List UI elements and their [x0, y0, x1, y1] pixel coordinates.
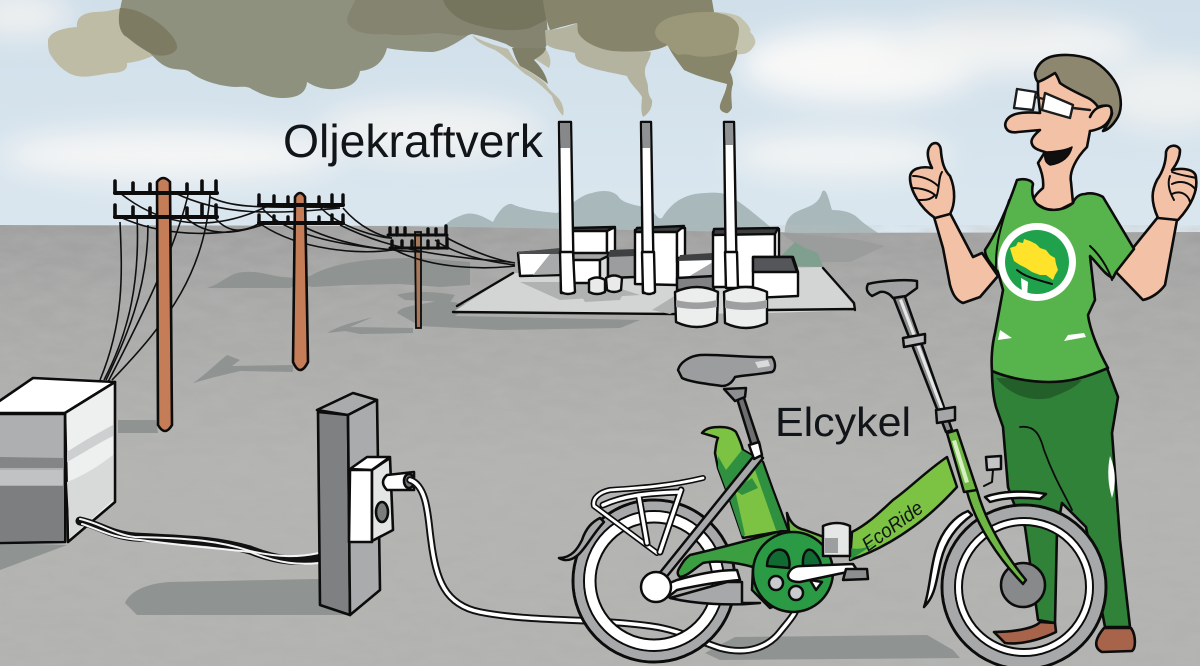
mouth: [1045, 147, 1072, 165]
charging post: [317, 393, 414, 615]
small tanks: [589, 278, 605, 294]
glasses: [1014, 89, 1090, 118]
head tube: [947, 430, 977, 492]
front wheel: [942, 505, 1106, 666]
saddle: [678, 355, 775, 386]
large tank two: [724, 287, 767, 328]
left arm and hand: [910, 143, 998, 303]
cable bundle from box to charging post: [80, 519, 319, 564]
chimney three: [724, 122, 737, 288]
neck and head: [1005, 70, 1112, 213]
smoke: dark right mass: [543, 0, 714, 52]
chain guard: [678, 532, 790, 608]
building: tall block one: [572, 230, 607, 253]
rear hub: [641, 572, 671, 602]
folding clamp: [936, 407, 955, 423]
ground shadows: [0, 232, 960, 660]
seat post: [735, 392, 760, 450]
handlebar: [867, 280, 917, 298]
battery and seat tube: [702, 427, 788, 538]
smoke: plume two: [545, 23, 652, 117]
chimney two: [641, 122, 654, 293]
wall socket: [349, 457, 393, 542]
smoke: light left puff: [48, 8, 155, 77]
shadows on platform: [520, 282, 720, 314]
utility pole one: [115, 178, 217, 431]
handlebar post: [893, 294, 952, 432]
chimney one: [559, 122, 574, 293]
smoke: grey main mass: [120, 0, 500, 98]
plug: [383, 472, 414, 490]
front fender: [924, 511, 972, 607]
chain stay: [660, 570, 740, 597]
smoke: middle medium mass: [347, 0, 548, 52]
bell: [986, 456, 1001, 470]
smoke: plume three: [668, 46, 737, 113]
building: low centre: [678, 255, 713, 278]
smoke cloud from chimneys: [48, 0, 755, 117]
large tank one: [675, 287, 718, 327]
overhead wires: [120, 193, 515, 268]
luggage rack: [594, 478, 703, 553]
crank and pedal: [788, 564, 857, 582]
ground: [0, 225, 1200, 666]
charging cable to bike: [410, 480, 795, 651]
chainring: [753, 532, 833, 612]
left shoe: [994, 622, 1056, 643]
building: grey middle: [608, 252, 635, 278]
seat stay tube: [658, 452, 763, 580]
front hub: [1001, 563, 1045, 607]
green trousers: [992, 368, 1130, 627]
power lines and poles: [100, 178, 515, 431]
smoke: dark patch at left: [119, 8, 177, 56]
hair: [1035, 55, 1121, 131]
tree by plant: [780, 242, 823, 267]
heading: Oljekraftverk: Oljekraftverk: [283, 115, 544, 167]
utility pole three: [388, 226, 448, 328]
building: tall block two: [635, 230, 677, 285]
smoke: medium right puff: [655, 12, 739, 57]
wires down to transformer box: [100, 195, 210, 382]
distant tree line behind power plant: [440, 191, 887, 240]
power plant: [453, 122, 857, 328]
utility pole two: [259, 193, 343, 370]
frame: main green tube: [850, 457, 957, 560]
smoke: plume one: [472, 35, 564, 116]
fork: [966, 488, 1026, 584]
green t-shirt: [985, 179, 1134, 382]
building: low left: [518, 250, 560, 276]
smoke: pale right puff: [713, 12, 755, 55]
transformer box: [0, 378, 115, 543]
right shoe: [1096, 628, 1135, 652]
right arm and hand: [1116, 146, 1196, 300]
building: lower block: [573, 260, 600, 283]
sky background with clouds: [0, 0, 1200, 235]
rear wheel: [573, 500, 735, 662]
motor housing: [823, 523, 850, 556]
building: tall block three: [713, 232, 775, 287]
rear fender: [559, 518, 604, 560]
plant base platform: [453, 267, 857, 314]
shirt logo: sun and tree badge: [998, 223, 1076, 301]
ear: [1090, 106, 1112, 131]
brand name on frame: EcoRide: [858, 497, 928, 556]
person: [910, 55, 1196, 652]
electric bike: [559, 280, 1106, 666]
building: front right: [753, 257, 798, 298]
heading: Elcykel: Elcykel: [775, 399, 911, 445]
